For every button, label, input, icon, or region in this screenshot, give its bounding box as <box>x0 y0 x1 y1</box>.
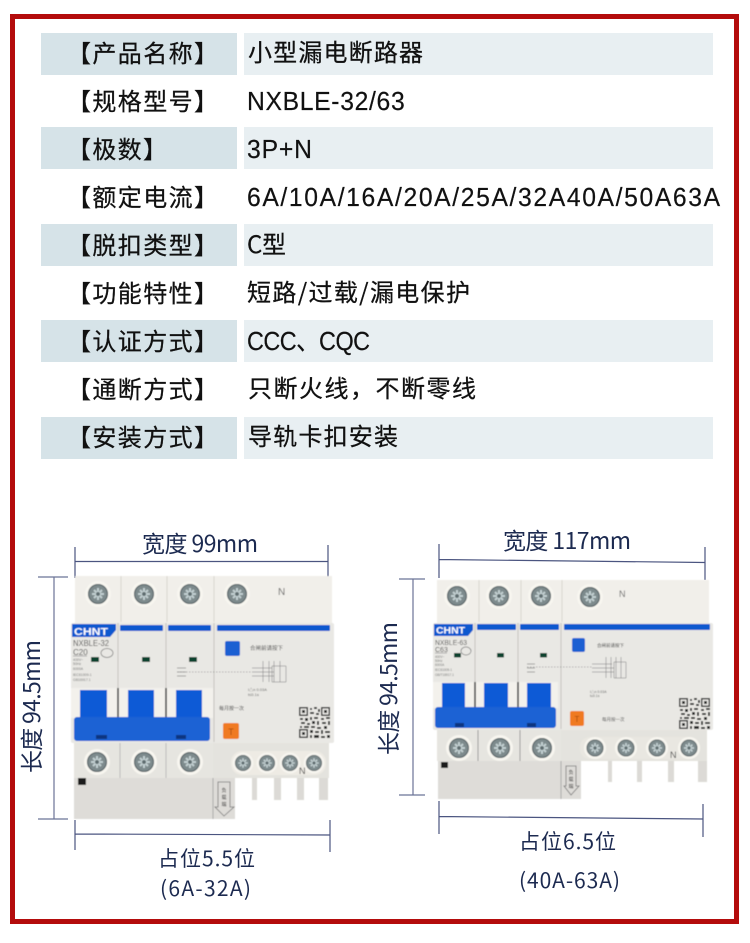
row: installation <box>41 417 713 459</box>
breaker photo 32A <box>71 576 334 819</box>
toggle handle <box>433 682 558 728</box>
width dimension 99mm <box>75 525 328 578</box>
row: model <box>67 82 405 117</box>
bottom housing and load block: 载 <box>221 794 227 801</box>
width dimension 99mm: 宽度 99mm <box>142 525 258 559</box>
bottom dimension <box>75 820 330 852</box>
row: poles: 【极数】 <box>67 130 167 165</box>
test instruction and wiring diagram: 每月按一次 <box>602 716 625 723</box>
row: rated current <box>67 178 720 213</box>
row: rated current: 【额定电流】 <box>67 178 218 213</box>
top terminal block <box>437 580 709 624</box>
model text: NXBLE-32 <box>73 639 110 648</box>
test instruction and wiring diagram <box>177 641 286 712</box>
model text: 400V~ <box>73 658 83 662</box>
main body panel <box>71 623 334 743</box>
test instruction and wiring diagram: 每月按一次 <box>219 705 244 712</box>
test button: T <box>575 715 580 724</box>
top terminal block <box>75 576 332 623</box>
model text <box>435 640 471 677</box>
slot width 6.5: 占位6.5位 <box>519 826 616 856</box>
bottom housing and load block <box>437 729 707 799</box>
specification table <box>41 33 720 459</box>
model text: GB/T16917.1 <box>435 673 454 677</box>
bottom housing and load block: 端 <box>221 801 227 808</box>
row: installation: 导轨卡扣安装 <box>248 417 398 452</box>
test button: T <box>228 727 234 737</box>
bottom housing and load block: 负 <box>568 769 574 776</box>
breaker photo 63A <box>433 580 713 799</box>
length dimension 94.5mm: 长度 94.5mm <box>13 640 47 773</box>
row: product name <box>41 33 713 75</box>
row: certification: 【认证方式】 <box>67 322 218 357</box>
width dimension 117mm <box>439 522 705 580</box>
QR code <box>299 707 330 738</box>
model text: GB16917.1 <box>73 678 91 682</box>
row: trip type: 【脱扣类型】 <box>67 226 218 261</box>
width dimension 117mm: 宽度 117mm <box>503 522 631 556</box>
model text: NXBLE-63 <box>435 640 467 647</box>
CHNT brand label <box>434 624 473 636</box>
row: installation: 【安装方式】 <box>67 418 218 453</box>
indicators <box>454 653 547 658</box>
model text: 50Hz <box>73 662 81 666</box>
row: product name: 小型漏电断路器 <box>248 33 423 68</box>
row: rated current: 6A/10A/16A/20A/25A/32A40A/50A63A <box>247 183 720 212</box>
row: breaking mode <box>67 369 476 405</box>
main body panel <box>433 623 713 730</box>
row: trip type: C型 <box>247 225 286 260</box>
model text: 400V~ <box>435 655 444 659</box>
current range 6A-32A: (6A-32A) <box>160 873 251 903</box>
bottom dimension <box>439 801 703 837</box>
row: breaking mode: 只断火线，不断零线 <box>248 369 476 404</box>
row: certification <box>41 320 713 362</box>
CHNT brand label: CHNT <box>436 626 465 636</box>
bottom housing and load block: 端 <box>568 783 574 790</box>
test instruction and wiring diagram: t≤0.1s <box>590 694 600 698</box>
model text: C63 <box>435 647 448 654</box>
length dimension 94.5mm <box>13 577 68 819</box>
bottom housing and load block: 负 <box>221 787 227 794</box>
row: certification: CCC、CQC <box>247 328 370 356</box>
model text <box>73 639 113 682</box>
row: model: NXBLE-32/63 <box>247 87 405 116</box>
test instruction and wiring diagram: t≤0.1s <box>248 692 259 697</box>
right breaker diagram <box>370 522 713 895</box>
row: features: 【功能特性】 <box>67 274 218 309</box>
length dimension 94.5mm <box>370 579 425 795</box>
row: product name: 【产品名称】 <box>67 34 218 69</box>
left breaker diagram <box>13 525 334 903</box>
model text: IEC61009-1 <box>435 668 452 672</box>
row: features: 短路/过载/漏电保护 <box>247 273 470 308</box>
test instruction and wiring diagram <box>527 638 626 723</box>
QR code <box>679 698 710 729</box>
CHNT brand label <box>72 624 116 638</box>
bottom housing and load block: 载 <box>568 776 574 783</box>
toggle handle <box>71 688 213 741</box>
model text: IEC61009-1 <box>73 673 92 677</box>
slot width 5.5: 占位5.5位 <box>158 843 255 873</box>
test instruction and wiring diagram: 合闸前请按下 <box>250 644 284 652</box>
row: breaking mode: 【通断方式】 <box>67 370 218 405</box>
model text: 50Hz <box>435 659 443 663</box>
length dimension 94.5mm: 长度 94.5mm <box>370 622 404 755</box>
current range 40A-63A: (40A-63A) <box>519 865 620 895</box>
model text: 6000A <box>435 663 445 667</box>
test button <box>223 723 239 739</box>
model text: C20 <box>73 648 88 657</box>
bottom housing and load block: N <box>299 766 306 776</box>
top terminal block: N <box>278 587 285 598</box>
model text: 6000A <box>73 667 84 671</box>
row: poles <box>41 127 713 169</box>
test instruction and wiring diagram: I△n 0.03A <box>590 689 607 694</box>
test button <box>570 711 584 726</box>
row: model: 【规格型号】 <box>67 82 218 117</box>
bottom housing and load block: N <box>670 750 676 760</box>
top terminal block: N <box>619 589 626 599</box>
test instruction and wiring diagram: 合闸前请按下 <box>597 642 624 649</box>
CHNT brand label: CHNT <box>74 627 108 638</box>
test instruction and wiring diagram: I△n 0.03A <box>248 686 267 692</box>
row: trip type <box>41 224 713 266</box>
bottom housing and load block <box>74 742 329 819</box>
row: features <box>67 273 470 309</box>
row: poles: 3P+N <box>247 135 312 164</box>
indicators <box>91 657 197 662</box>
